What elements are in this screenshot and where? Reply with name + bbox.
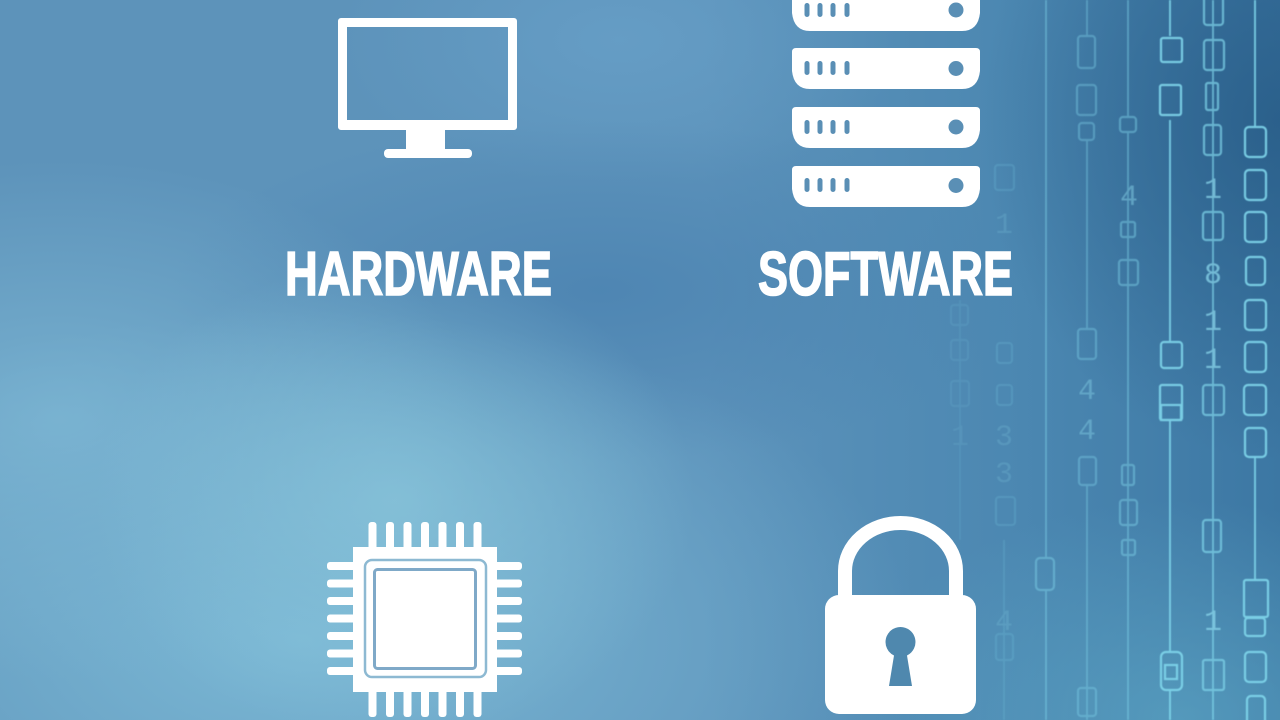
code column 7	[1203, 0, 1224, 720]
chip outer ring	[365, 560, 486, 677]
code column 2: 1	[995, 209, 1013, 243]
padlock keyhole	[886, 627, 915, 686]
binary code columns	[951, 0, 1268, 720]
code column 7: 1	[1204, 344, 1222, 378]
chip body	[353, 547, 497, 692]
code column 4: 4	[1078, 375, 1096, 409]
code column 3	[1036, 0, 1054, 720]
icon: padlock	[825, 523, 976, 714]
heading: software: SOFTWARE	[758, 240, 1013, 309]
server unit 1	[792, 0, 980, 31]
padlock shackle	[845, 523, 956, 600]
code column 2: 3	[995, 421, 1013, 455]
server unit 4	[792, 166, 980, 207]
code column 5	[1119, 0, 1138, 720]
icon: server stack	[792, 0, 980, 207]
chip pins	[327, 522, 522, 717]
code column 2: 3	[995, 458, 1013, 492]
server unit 3	[792, 107, 980, 148]
icon: microchip	[327, 522, 522, 717]
code column 1: 1	[951, 421, 969, 455]
heading: hardware: HARDWARE	[285, 240, 552, 309]
code column 1	[951, 300, 969, 540]
chip inner ring	[374, 570, 476, 668]
code column 7: 1	[1204, 606, 1222, 640]
padlock body	[825, 595, 976, 714]
code column 4: 4	[1078, 415, 1096, 449]
code column 7: 1	[1204, 306, 1222, 340]
code column 2	[995, 165, 1015, 720]
server unit 2	[792, 48, 980, 89]
code column 7: 8	[1204, 259, 1222, 293]
icon: monitor	[338, 18, 517, 158]
code column 7: 1	[1204, 174, 1222, 208]
code column 4	[1077, 0, 1096, 720]
code column 2: 4	[995, 606, 1013, 640]
code column 5: 4	[1120, 181, 1138, 215]
code column 6	[1160, 0, 1182, 720]
code column 8	[1244, 0, 1268, 720]
